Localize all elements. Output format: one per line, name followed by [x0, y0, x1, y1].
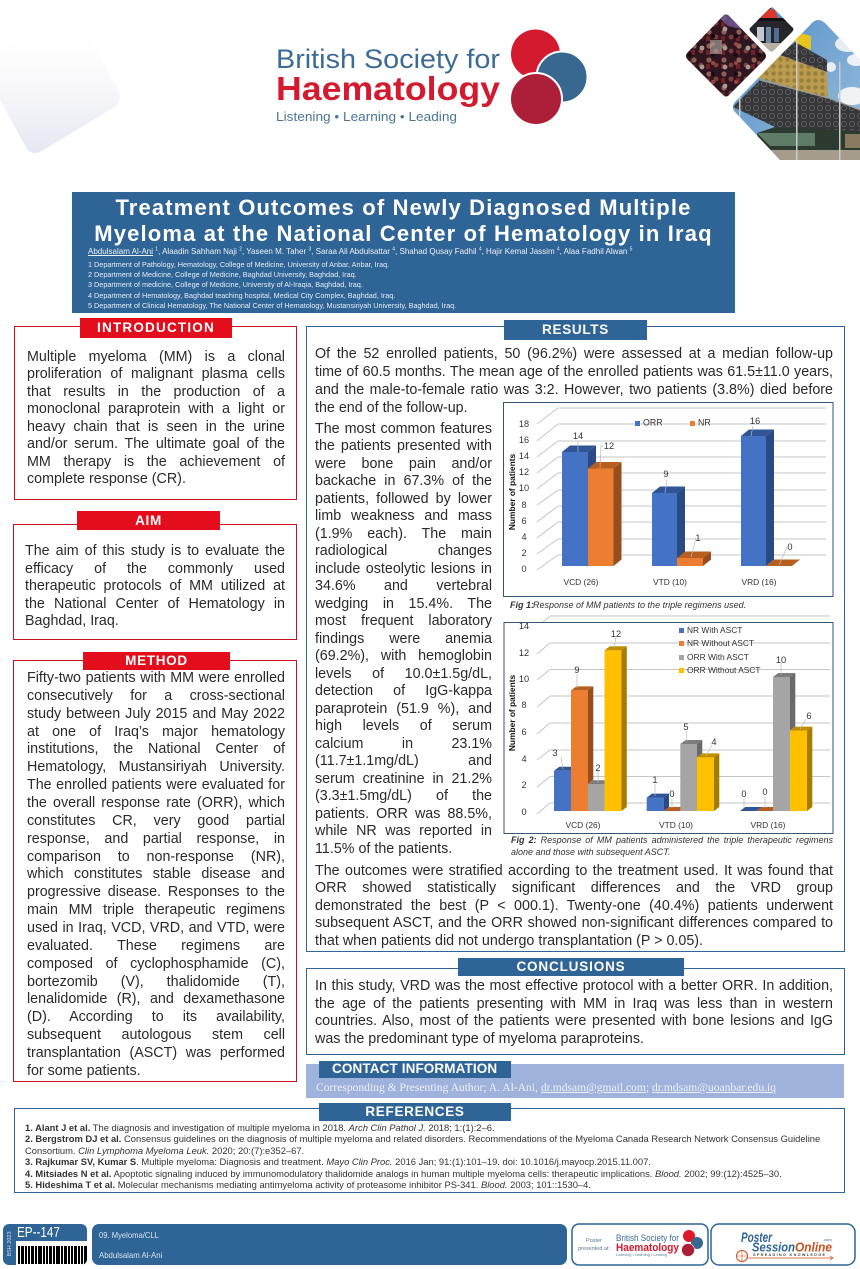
text: introduction: MM therapy is the achievement of: [27, 454, 285, 470]
text: method: subsequent autologous stem cell: [27, 1027, 285, 1043]
heading: method: METHOD: [125, 653, 188, 668]
text: method: at one of Iraq’s major hematology: [27, 724, 285, 740]
footer: poster session online logo: SPREADING KNOWLEDGE: [753, 1253, 825, 1257]
panel: contact information: [306, 1064, 844, 1098]
text: results features column: 34.6% and vertebral: [315, 578, 492, 594]
text: method: progressive disease. Responses to the: [27, 884, 285, 900]
text: results features column: were bone pain and/or: [315, 456, 492, 472]
x axis labels: VCD (26): [564, 577, 599, 587]
heading: introduction: [80, 318, 232, 338]
x axis labels: VCD (26): [566, 820, 601, 830]
y axis ticks: 0: [521, 564, 527, 574]
text: references: 4. Mitsiades N et al. Apoptotic signaling induced by immunomodulatory thalidomide analogs in human multiple myeloma cells: therapeutic implications. Blood. 2002; 99:(12):4525–30.: [25, 1168, 782, 1178]
y axis ticks: 6: [521, 516, 527, 526]
poster number: EP--147: [17, 1224, 60, 1241]
y axis ticks: [519, 419, 529, 574]
footer: poster presented at logo: presented at:: [578, 1246, 611, 1252]
value labels: 9: [663, 469, 669, 479]
footer: poster presented at logo: Poster: [586, 1238, 602, 1244]
footer: poster presented at logo: British Society for: [616, 1233, 679, 1243]
panel: results: [306, 326, 845, 952]
text: results features column: high levels of serum: [315, 718, 492, 734]
chart: figure 1 response to triple regimens: [503, 402, 834, 597]
text: method: Fifty-two patients with MM were enrolled: [27, 670, 285, 686]
text: results features column: serum creatinine in 21.2%: [315, 770, 492, 786]
value labels: 0: [787, 542, 793, 552]
value labels: 3: [552, 748, 558, 758]
text: results features column: findings were anemia: [315, 630, 492, 646]
text: results intro: the end of the follow-up.: [315, 400, 468, 416]
text: references: [25, 1122, 820, 1190]
text: conclusions: countries. Also, most of the patients were presented with bone lesions and IgG: [315, 1013, 833, 1029]
y axis title: Number of patients: [507, 675, 517, 751]
footer: poster session online logo: Online: [795, 1240, 832, 1254]
text: references: 1. Alant J et al. The diagnosis and investigation of multiple myeloma in 2018. Arch Clin Pathol J. 2018; 1:(1):2–6.: [25, 1122, 495, 1132]
figure 2 caption: [511, 835, 833, 857]
text: method: study between July 2015 and May 2022: [27, 706, 285, 722]
text: results intro: [315, 346, 833, 416]
text: aim: therapeutic protocols of MM utilized at: [25, 578, 285, 594]
value labels: 16: [750, 416, 760, 426]
panel: aim: [13, 524, 297, 640]
heading: results: [504, 320, 647, 340]
figure 1 caption: Fig 1:: [510, 600, 534, 610]
title banner: [72, 192, 735, 313]
value labels: 2: [595, 763, 601, 773]
header photo collage: [686, 8, 860, 160]
heading: references: REFERENCES: [365, 1104, 465, 1119]
figure 2 caption: alone and those with subsequent ASCT.: [511, 847, 670, 857]
text: results outcomes: subsequent ASCT, and the ORR showed non-significant differences compared to: [315, 915, 833, 931]
text: method: The enrolled patients were evaluated for: [27, 777, 285, 793]
text: results outcomes: [315, 862, 833, 948]
decorative grey diamond: [0, 90, 120, 153]
value labels: 12: [604, 441, 614, 451]
text: results features column: while NR was reported in: [315, 823, 492, 839]
footer: poster presented at logo: Haematology: [616, 1242, 680, 1254]
value labels: 6: [806, 711, 812, 721]
text: method: lenalidomide (R), and dexamethasone: [27, 991, 285, 1007]
text: results features column: most frequent laboratory: [315, 613, 492, 629]
value labels: 10: [776, 655, 786, 665]
value labels: 1: [695, 533, 701, 543]
legend: NR: [698, 418, 711, 428]
text: results features column: limb weakness and mass: [315, 508, 492, 524]
text: results outcomes: The outcomes were stratified according to the treatment used. It was found that: [315, 862, 833, 878]
affiliations: [88, 260, 456, 310]
affiliations: 5 Department of Clinical Hematology, The National Center of Hematology, Mustansiriyah University, Baghdad, Iraq.: [88, 301, 456, 310]
text: results features column: calcium in 23.1%: [315, 736, 492, 752]
title: [94, 195, 713, 246]
y axis ticks: 18: [519, 419, 529, 429]
logo: British Society for Haematology: British Society for: [276, 44, 500, 74]
y axis ticks: 8: [521, 500, 527, 510]
text: method: for some patients.: [27, 1063, 141, 1079]
text: introduction: complete response (CR).: [27, 471, 186, 487]
text: aim: efficacy of the commonly used: [25, 560, 285, 576]
value labels: 0: [762, 787, 768, 797]
text: results features column: (1.9% each). The main: [315, 526, 492, 542]
date code: BSH 2023: [7, 1231, 13, 1257]
y axis ticks: 6: [521, 727, 527, 737]
text: method: consecutively for a cross-sectional: [27, 688, 285, 704]
text: results outcomes: demonstrated the best (P < 000.1). Twenty-one (40.4%) patients underwent: [315, 898, 833, 914]
text: introduction: heavy chain that is seen in the urine: [27, 418, 285, 434]
value labels: 4: [711, 737, 717, 747]
authors: Abdulsalam Al-Ani 1, Alaadin Sahham Naji 2, Yaseen M. Taher 3, Saraa Ali Abdulsattar 4, Shahad Qusay Fadhil 4, Hajir Kemal Jassim 4, Alaa Fadhil Alwan 5: [88, 246, 632, 256]
text: method: comparison to non-response (NR),: [27, 849, 285, 865]
text: results features column: (11.7±1.1mg/dL) and: [315, 753, 492, 769]
value labels: 0: [741, 789, 747, 799]
y axis ticks: 2: [521, 780, 527, 790]
y axis ticks: 16: [519, 435, 529, 445]
footer: poster session online logo: .com: [823, 1237, 832, 1242]
y axis ticks: 8: [521, 700, 527, 710]
text: references: 2. Bergstrom DJ et al. Consensus guidelines on the diagnosis of multiple myeloma and related disorders. Recommendations of the Myeloma Canada Research Network Consensus Guideline: [25, 1132, 820, 1144]
text: results features column: levels of 10.0±1.5g/dL,: [315, 666, 492, 682]
legend: ORR With ASCT: [687, 652, 749, 662]
heading: results: RESULTS: [542, 322, 609, 337]
x axis labels: VRD (16): [742, 577, 777, 587]
panel: conclusions: [306, 968, 845, 1055]
text: aim: [25, 543, 285, 629]
text: introduction: [27, 348, 285, 487]
text: results features column: [315, 420, 492, 856]
heading: conclusions: [458, 958, 684, 976]
text: method: main MM triple therapeutic regimens: [27, 902, 285, 918]
heading: conclusions: CONCLUSIONS: [516, 959, 626, 974]
value labels: 14: [573, 431, 583, 441]
affiliations: 3 Department of medicine, College of Medicine, University of Al-Iraqia, Baghdad, Iraq.: [88, 280, 363, 289]
text: conclusions: the age of the patients presenting with MM in Iraq was less than in western: [315, 996, 833, 1012]
legend: ORR Without ASCT: [687, 665, 761, 675]
logo: British Society for Haematology: Haematology: [276, 70, 501, 107]
text: aim: Baghdad, Iraq.: [25, 613, 119, 629]
barcode: [16, 1241, 87, 1265]
text: results outcomes: ORR showed statistically significant differences and the VRD group: [315, 880, 833, 896]
figure 1 caption: Response of MM patients to the triple regimens used.: [533, 600, 746, 610]
y axis ticks: 14: [519, 451, 529, 461]
text: method: transplantation (ASCT) was performed: [27, 1045, 285, 1061]
text: method: bortezomib (V), thalidomide (T),: [27, 974, 285, 990]
text: aim: the National Center of Hematology in: [25, 596, 285, 612]
x axis labels: VTD (10): [653, 577, 687, 587]
y axis ticks: 4: [521, 754, 527, 764]
text: method: evaluated. These regimens are: [27, 938, 285, 954]
text: results intro: and the male-to-female ratio was 3:2. However, two patients (3.8%) died before: [315, 382, 833, 398]
text: results features column: (3.3±1.5mg/dL) of the: [315, 788, 492, 804]
text: method: Hematology, Mustansiriyah University.: [27, 759, 285, 775]
heading: aim: [77, 511, 220, 530]
text: aim: The aim of this study is to evaluate the: [25, 543, 285, 559]
bars: [554, 646, 812, 811]
heading: aim: AIM: [135, 513, 162, 528]
text: contact details: Corresponding & Presenting Author; A. Al-Ani, dr.mdsam@gmail.com; dr.mdsam@uoanbar.edu.iq: [316, 1081, 776, 1094]
value labels: 12: [611, 629, 621, 639]
legend: [635, 418, 711, 428]
affiliations: 2 Department of Medicine, College of Medicine, Baghdad University, Baghdad, Iraq.: [88, 270, 357, 279]
value labels: 0: [669, 789, 675, 799]
title: Myeloma at the National Center of Hematology in Iraq: [94, 220, 713, 246]
text: results features column: backache in 67.3% of the: [315, 473, 492, 489]
footer: poster presented at logo: Listening • Learning • Leading: [616, 1252, 667, 1257]
footer: category and author: [92, 1224, 567, 1265]
footer: category and author: Abdulsalam Al-Ani: [99, 1250, 162, 1260]
y axis ticks: 14: [519, 621, 529, 631]
title: Treatment Outcomes of Newly Diagnosed Multiple: [115, 195, 692, 220]
legend: NR With ASCT: [687, 625, 742, 635]
y axis ticks: 10: [519, 674, 529, 684]
text: references: 5. Hideshima T et al. Molecular mechanisms mediating antimyeloma activity of proteasome inhibitor PS-341. Blood. 2003; 101::1530–4.: [25, 1178, 591, 1190]
value labels: 5: [683, 722, 689, 732]
text: conclusions: In this study, VRD was the most effective protocol with a better ORR. In addition,: [315, 978, 833, 994]
y axis ticks: 0: [521, 807, 527, 817]
text: method: constitutes CR, very good partial: [27, 813, 285, 829]
legend: [679, 625, 761, 675]
text: results features column: 11.5% of the patients.: [315, 840, 452, 856]
footer: poster id and barcode: [3, 1224, 87, 1265]
text: introduction: and/or serum. The ultimate goal of the: [27, 436, 285, 452]
text: results features column: detection of IgG-kappa: [315, 683, 492, 699]
value labels: [573, 416, 793, 565]
logo: British Society for Haematology: Listening • Learning • Leading: [276, 109, 457, 124]
value labels: 1: [652, 775, 658, 785]
x axis labels: VRD (16): [751, 820, 786, 830]
y axis title: Number of patients: [507, 454, 517, 530]
footer: poster session online logo: [710, 1223, 856, 1266]
legend: NR Without ASCT: [687, 638, 754, 648]
heading: introduction: INTRODUCTION: [97, 320, 215, 335]
text: method: which constitutes stable disease and: [27, 866, 285, 882]
text: method: response, and partial response, in: [27, 831, 285, 847]
text: conclusions: was the predominant type of myeloma paraproteins.: [315, 1031, 644, 1047]
text: method: the overall response rate (ORR), which: [27, 795, 285, 811]
affiliations: 1 Department of Pathology, Hematology, College of Medicine, University of Anbar, Anbar, Iraq.: [88, 260, 389, 269]
footer: poster session online logo: Poster: [741, 1229, 773, 1245]
text: results intro: Of the 52 enrolled patients, 50 (96.2%) were assessed at a median follow-up: [315, 346, 833, 362]
text: results features column: wedging in 15.4%. The: [315, 596, 492, 612]
text: results features column: radiological changes: [315, 543, 492, 559]
x axis labels: [566, 820, 786, 830]
y axis ticks: 4: [521, 532, 527, 542]
panel: references: [14, 1108, 845, 1193]
legend: ORR: [643, 418, 663, 428]
x axis labels: VTD (10): [659, 820, 693, 830]
y axis ticks: 2: [521, 548, 527, 558]
text: method: institutions, the National Center of: [27, 741, 285, 757]
text: method: used in Iraq, VCD, VRD, and VTD, were: [27, 920, 285, 936]
text: method: composed of cyclophosphamide (C),: [27, 956, 285, 972]
footer: poster session online logo: Session: [752, 1240, 795, 1254]
text: method: (D). According to its availability,: [27, 1009, 285, 1025]
affiliations: 4 Department of Hematology, Baghdad teaching hospital, Medical City Complex, Baghdad, Iraq.: [88, 291, 395, 300]
panel: introduction: [14, 326, 297, 500]
y axis ticks: 10: [519, 483, 529, 493]
text: results features column: The most common features: [315, 420, 492, 436]
text: results outcomes: that when patients did not undergo transplantation (P > 0.05).: [315, 932, 703, 948]
panel: method: [13, 660, 297, 1082]
chart: figure 2 response with and without ASCT: [504, 616, 834, 834]
text: references: Consortium. Clin Lymphoma Myeloma Leuk. 2020; 20:(7):e352–67.: [25, 1144, 304, 1156]
text: results features column: the patients presented with: [315, 438, 492, 454]
text: method: [27, 670, 285, 1079]
text: results features column: patients. ORR was 88.5%,: [315, 806, 492, 822]
text: conclusions: [315, 978, 833, 1047]
bars: [562, 430, 800, 566]
text: results features column: (69.2%), with hemoglobin: [315, 648, 492, 664]
y axis ticks: [519, 621, 529, 817]
value labels: 9: [574, 665, 580, 675]
text: references: 3. Rajkumar SV, Kumar S. Multiple myeloma: Diagnosis and treatment. Mayo Clin Proc. 2016 Jan; 91:(1):101–19. doi: 10.1016/j.mayocp.2015.11.007.: [25, 1156, 651, 1166]
y axis ticks: 12: [519, 648, 529, 658]
heading: contact information: CONTACT INFORMATION: [332, 1061, 497, 1076]
y axis ticks: 12: [519, 467, 529, 477]
text: results features column: paraprotein (51.9 %), and: [315, 700, 492, 716]
text: results intro: time of 60.5 months. The mean age of the enrolled patients was 61.5±11.0 years,: [315, 364, 833, 380]
footer: category and author: 09. Myeloma/CLL: [99, 1230, 159, 1240]
text: introduction: monoclonal paraprotein with a light or: [27, 401, 285, 417]
heading: references: [319, 1103, 511, 1121]
figure 2 caption: Fig 2: Response of MM patients administered the triple therapeutic regimens: [511, 835, 833, 845]
logo: British Society for Haematology: [276, 30, 586, 124]
text: introduction: Multiple myeloma (MM) is a clonal: [27, 348, 285, 364]
text: results features column: include osteolytic lesions in: [315, 560, 492, 576]
footer: poster presented at logo: [571, 1223, 709, 1266]
x axis labels: [564, 577, 777, 587]
value labels: [552, 629, 812, 808]
text: introduction: that results in the production of a: [27, 384, 285, 400]
text: results features column: patients, followed by lower: [315, 490, 492, 506]
text: introduction: proliferation of malignant plasma cells: [27, 366, 285, 382]
heading: method: [83, 652, 230, 670]
